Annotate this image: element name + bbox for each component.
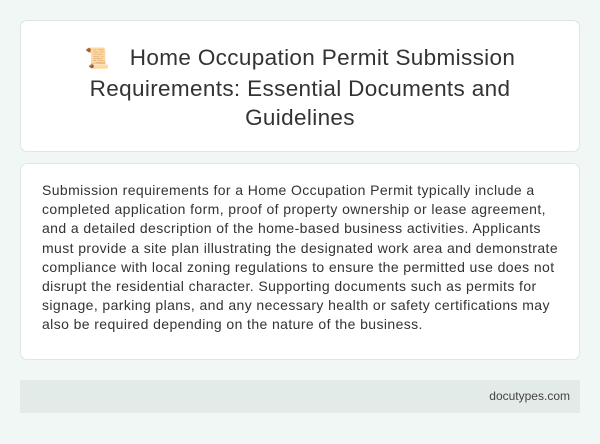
body panel [20, 163, 580, 360]
header panel [20, 20, 580, 152]
description text: Submission requirements for a Home Occupation Permit typically include a completed application form, proof of property ownership or lease agreement, and a detailed description of the home-based business activities. Applicants must provide a site plan illustrating the designated work area and demonstrate compliance with local zoning regulations to ensure the permitted use does not disrupt the residential character. Supporting documents such as permits for signage, parking plans, and any necessary health or safety certifications may also be required depending on the nature of the business. [42, 182, 558, 332]
footer [20, 380, 580, 413]
title: 📜 Home Occupation Permit Submission Requirements: Essential Documents and Guidelines [85, 45, 515, 130]
footer: docutypes.com [489, 389, 570, 403]
